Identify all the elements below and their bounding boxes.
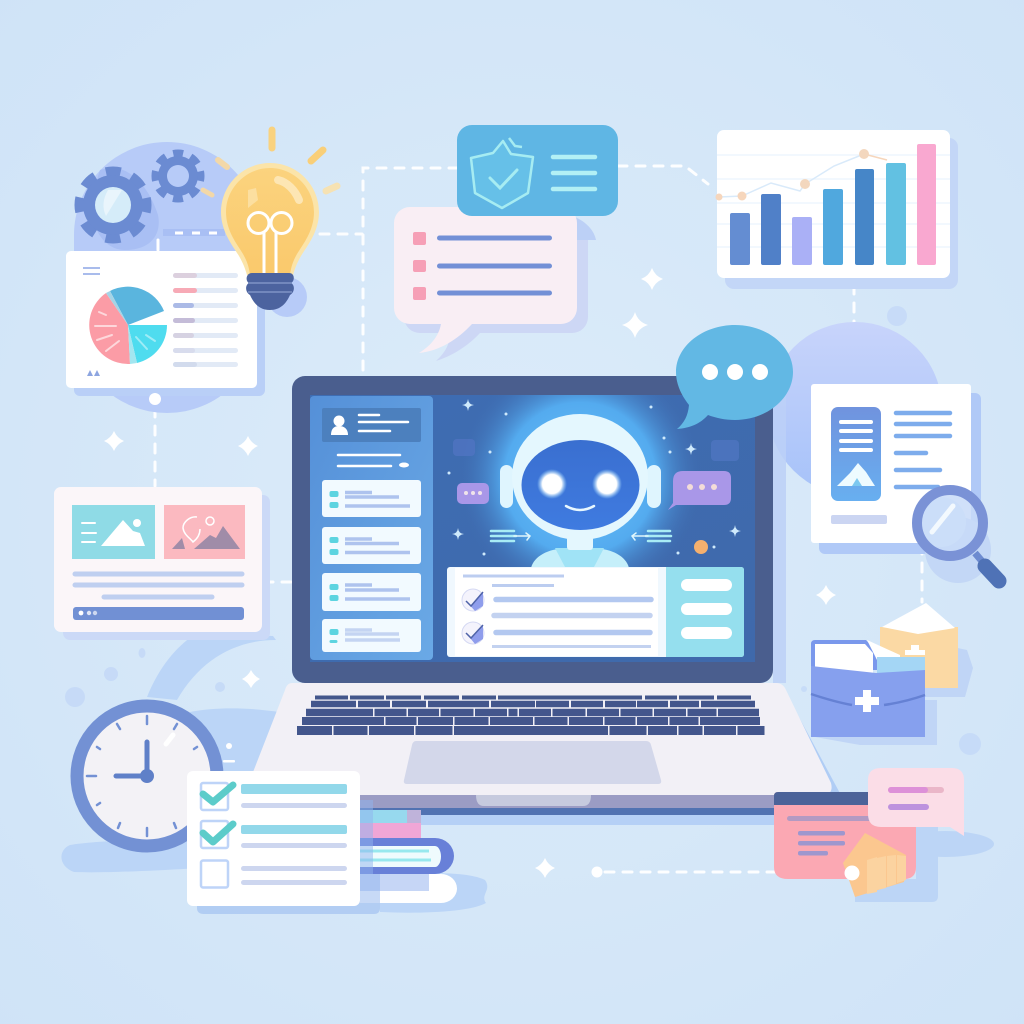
- panel: gears backdrop: [74, 142, 260, 413]
- robot body: [531, 548, 629, 568]
- connector end dots: [223, 743, 860, 880]
- sidebar card 2: [322, 527, 421, 564]
- robot helmet: [512, 414, 648, 540]
- panel: bar chart card: [716, 130, 958, 289]
- teal book: [360, 810, 407, 823]
- legend bars: [173, 273, 238, 367]
- robot neck: [567, 536, 593, 550]
- screen: right chat chip: [668, 471, 731, 510]
- blue book: [360, 838, 454, 874]
- icon: small gear: [155, 153, 201, 199]
- panel: pie chart card: [66, 251, 265, 396]
- tag icon: [843, 833, 906, 897]
- screen: right arrow icon: [632, 531, 671, 541]
- icon: clock: [77, 706, 217, 846]
- panel: checklist: [187, 771, 360, 906]
- screen: orange dot: [694, 540, 708, 554]
- sparkles: [104, 268, 836, 878]
- magnifier halo: [925, 517, 991, 583]
- card shadow: [855, 827, 938, 902]
- screen: [310, 395, 755, 662]
- filament: [248, 212, 292, 273]
- screen: left arrow icon: [491, 531, 530, 541]
- laptop: [247, 376, 842, 825]
- bulb rays: [203, 130, 337, 195]
- check icon 1: [462, 589, 484, 611]
- stacked books: [360, 810, 457, 903]
- folder: [811, 640, 925, 737]
- connector dot: [149, 393, 161, 405]
- pie chart: [89, 287, 167, 364]
- base: [246, 273, 294, 310]
- pink card: [774, 792, 916, 879]
- laptop lid: [292, 376, 773, 683]
- backdrop circle behind document: [768, 322, 942, 496]
- glass: [221, 163, 319, 275]
- screen: robot glow: [474, 395, 686, 567]
- robot eyes: [537, 469, 567, 499]
- screen: sidebar: [310, 396, 433, 660]
- decorative background shapes: [65, 306, 981, 755]
- check mark 1: [203, 785, 233, 802]
- bars: [730, 144, 936, 265]
- laptop base: [247, 683, 832, 815]
- trend line: [719, 154, 864, 197]
- screen: content panel: [447, 567, 744, 657]
- panel: image card: [54, 487, 270, 640]
- sidebar card 1: [322, 480, 421, 517]
- menu icon: [83, 268, 100, 274]
- folder shadow: [815, 700, 937, 745]
- checklist shadow: [197, 800, 380, 914]
- robot smile: [566, 506, 594, 510]
- robot visor: [522, 440, 640, 530]
- document thumbnail: [831, 407, 881, 501]
- panel: shield badge: [457, 125, 618, 216]
- icon: large gear: [80, 172, 146, 238]
- white book: [360, 874, 457, 903]
- check icon 2: [462, 622, 484, 644]
- laptop shadow: [770, 693, 842, 797]
- image thumbnail: pink: [164, 505, 245, 559]
- check mark 2: [203, 824, 233, 842]
- icon: shield: [471, 141, 533, 208]
- panel: document card: [811, 384, 981, 554]
- panel: pink speech bubble: [394, 207, 596, 361]
- icon: magnifying glass: [916, 490, 999, 583]
- bubble shadow: [404, 220, 588, 361]
- user header: [322, 408, 421, 442]
- drop icons: [87, 370, 100, 376]
- trackpad: [404, 741, 661, 784]
- robot ears: [500, 465, 513, 508]
- folder group: [811, 603, 973, 745]
- robot: [500, 414, 661, 568]
- backdrop arc and blobs behind clock: [61, 633, 487, 913]
- screen: left chat chip: [457, 483, 489, 504]
- big speech bubble: [676, 325, 793, 429]
- screen: faint tiles and stars: [448, 399, 741, 556]
- pink card group: [774, 768, 994, 902]
- keyboard: [297, 698, 767, 730]
- image thumbnail: mountains: [72, 505, 155, 559]
- connector: dashed lines: [155, 166, 922, 872]
- icon: light bulb: [203, 130, 337, 317]
- bubble body: [394, 207, 577, 353]
- sidebar card 3: [322, 573, 421, 611]
- text lines: [463, 574, 564, 578]
- action buttons: [681, 579, 732, 591]
- pink book: [360, 823, 421, 838]
- side shadow of lid: [773, 395, 786, 683]
- envelope: [880, 603, 958, 688]
- small pink bubble: [868, 768, 964, 836]
- sidebar card 4: [322, 619, 421, 652]
